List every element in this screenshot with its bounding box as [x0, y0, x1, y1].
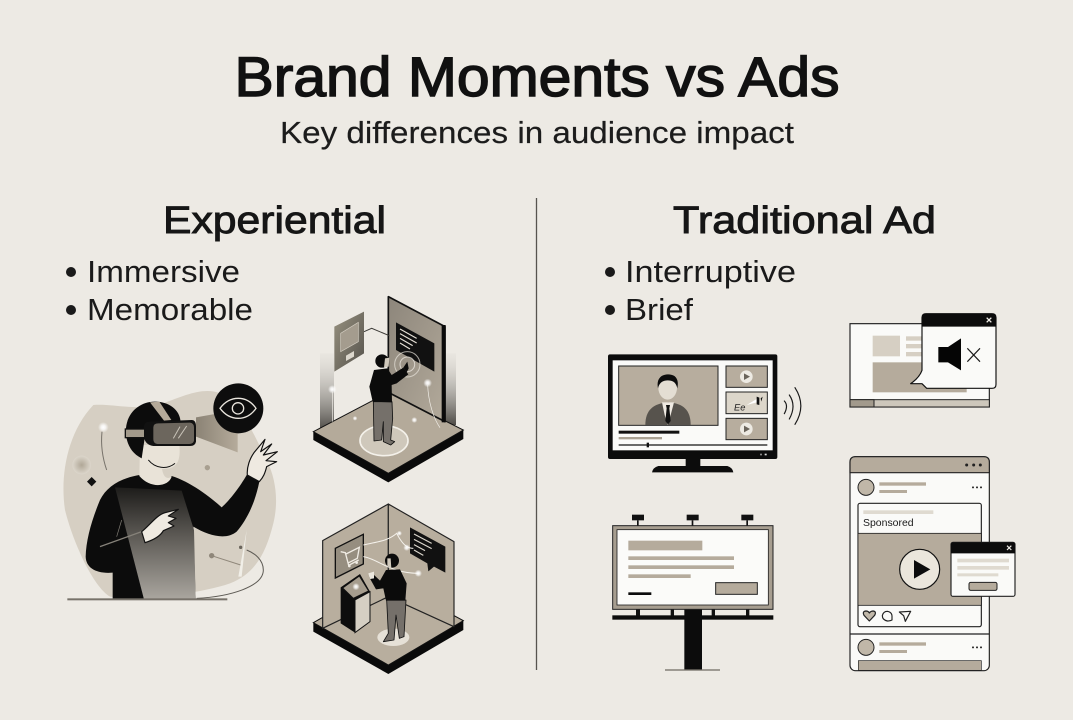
bullet list: experiential	[66, 254, 253, 327]
light columns	[320, 353, 334, 430]
icon: sound waves	[784, 388, 801, 424]
platform	[313, 621, 463, 674]
icon: eye	[213, 383, 263, 433]
thumbnails: Ee	[734, 402, 745, 412]
bullet list: traditional ad: Interruptive	[625, 254, 796, 289]
body	[86, 475, 259, 599]
sponsored card	[858, 503, 981, 627]
subtitle: Key differences in audience impact	[280, 115, 794, 150]
connection lines	[363, 533, 418, 573]
head	[139, 445, 180, 485]
illustration: television ad	[608, 354, 801, 472]
beam to eye icon	[196, 413, 238, 452]
popup over video	[951, 542, 1015, 596]
spot under person	[377, 629, 409, 646]
person	[369, 354, 409, 445]
chat panel	[410, 527, 445, 573]
illustration: muted browser popup	[850, 314, 996, 407]
icon: heart, comment, share	[863, 611, 911, 621]
panel: traditional ad	[605, 200, 1015, 671]
next post	[850, 632, 989, 636]
wall screen	[388, 297, 445, 422]
hand: lower	[100, 509, 178, 547]
sponsored card: Sponsored	[863, 518, 914, 529]
icon: play button	[900, 549, 940, 589]
ground line	[67, 598, 227, 600]
icon: muted speaker	[938, 338, 980, 370]
bullet list: traditional ad: Brief	[625, 292, 693, 327]
heading: experiential: Experiential	[163, 200, 386, 242]
VR headset	[125, 420, 196, 446]
walls	[323, 504, 388, 628]
post header	[858, 479, 874, 495]
bullet list: experiential: Immersive	[87, 254, 240, 289]
bullet list: experiential: Memorable	[87, 292, 253, 327]
illustration: retail kiosk room	[313, 504, 463, 674]
illustration: social feed ad	[850, 457, 1015, 671]
illustration: interactive wall booth	[313, 297, 463, 482]
thumbnails	[726, 366, 767, 440]
heading: traditional ad: Traditional Ad	[673, 200, 936, 242]
popup	[911, 314, 996, 388]
person	[368, 554, 407, 642]
video frame	[619, 366, 718, 425]
lights	[328, 385, 337, 394]
illustration: billboard	[612, 515, 773, 671]
illustration: person in VR headset	[63, 383, 277, 600]
kiosk	[341, 574, 370, 633]
floating panel	[334, 312, 364, 372]
hand: raised	[247, 439, 277, 482]
platform	[313, 430, 463, 482]
panel: experiential	[63, 200, 463, 674]
title: Brand Moments vs Ads	[234, 45, 840, 108]
icon: shopping cart panel	[335, 534, 363, 578]
bullet list: traditional ad	[605, 254, 796, 327]
